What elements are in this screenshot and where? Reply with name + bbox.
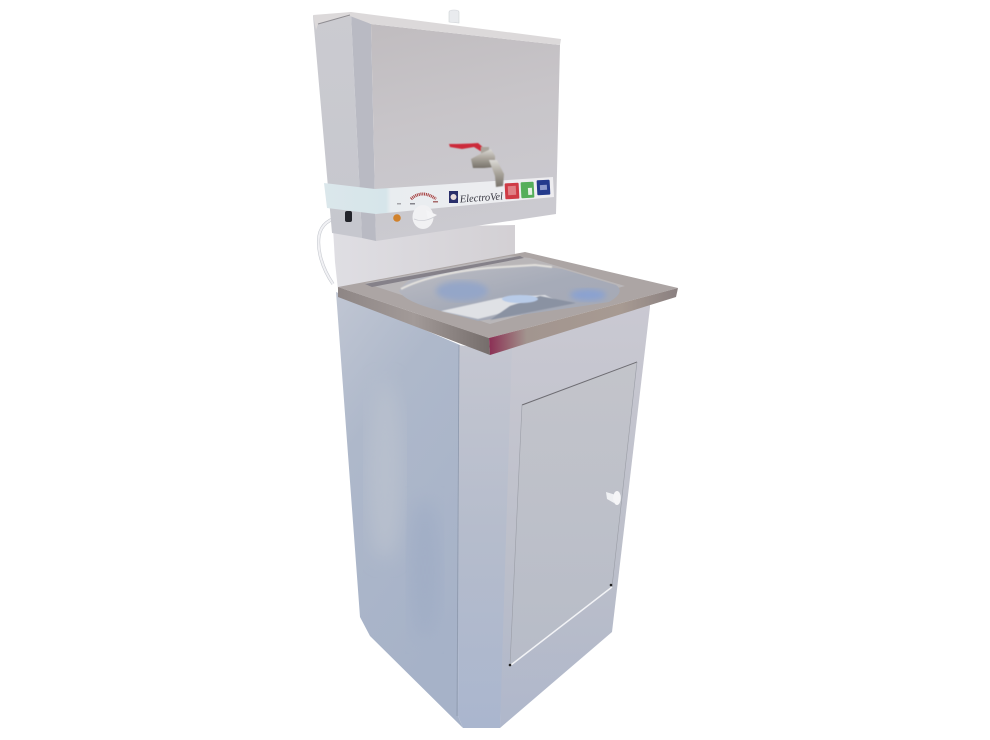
water tap (449, 143, 504, 187)
sink (338, 252, 678, 355)
certification badges (505, 180, 550, 199)
cabinet (336, 292, 650, 728)
thermostat knob (412, 205, 437, 229)
dial scale (397, 194, 438, 204)
filler cap (449, 10, 459, 23)
tank side (313, 14, 362, 238)
cabinet corner chamfer (458, 345, 512, 728)
power cord (319, 216, 344, 284)
indicator lamp (393, 214, 401, 222)
tank lid (313, 12, 561, 45)
backsplash panel (333, 225, 515, 290)
water tank (313, 10, 561, 241)
basin bowl (399, 265, 620, 321)
sink rim right (489, 288, 678, 355)
band (324, 177, 554, 214)
power socket (345, 211, 352, 222)
tank front (371, 24, 560, 241)
water reflections (436, 281, 606, 320)
cabinet left panel (336, 292, 463, 728)
cabinet front panel (500, 300, 650, 728)
sink top (338, 252, 678, 338)
door knob (606, 492, 616, 503)
sink rim left (338, 287, 490, 355)
tank corner (351, 14, 376, 241)
door (509, 362, 637, 666)
ElectroVel logo: ElectroVel (458, 191, 503, 206)
